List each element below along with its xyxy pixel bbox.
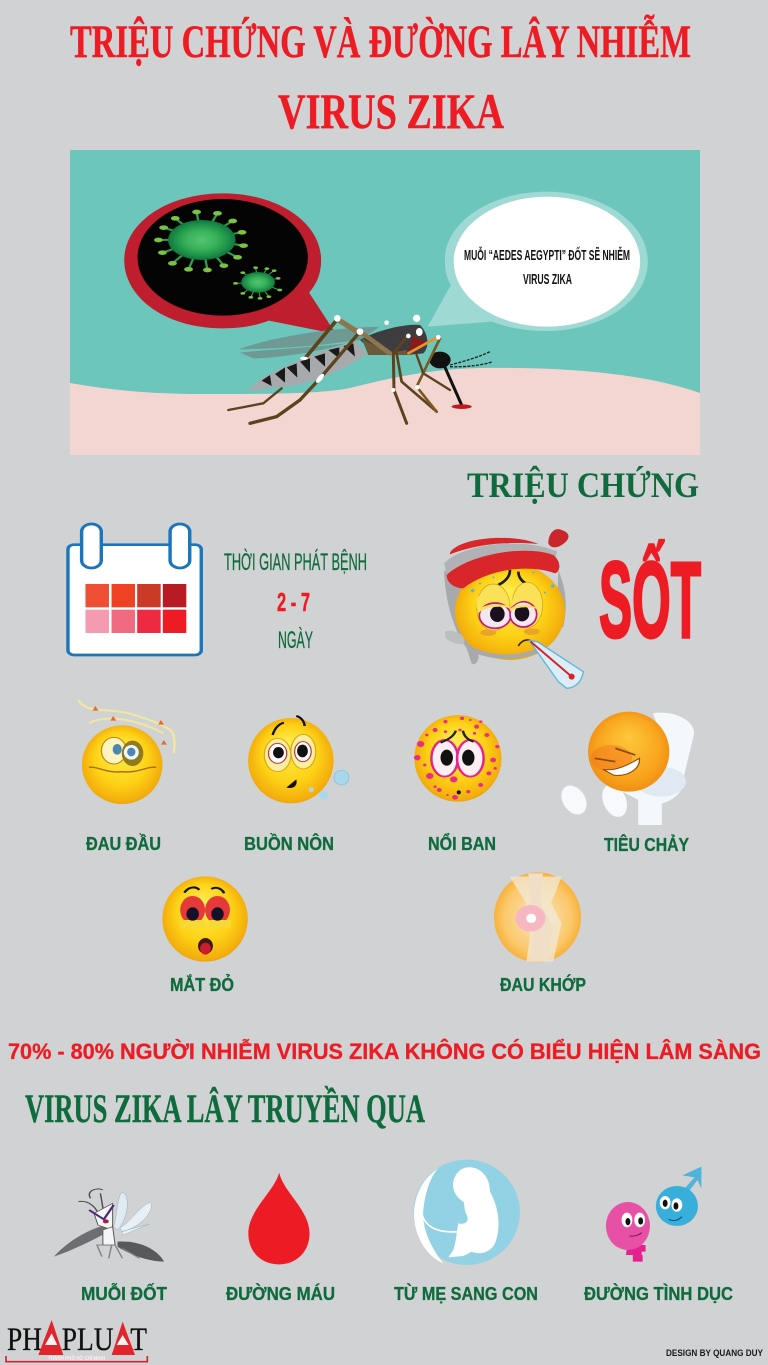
transmission labels: ĐƯỜNG MÁU	[226, 1283, 335, 1304]
symptom icons	[79, 700, 694, 962]
bubble text: MUỖI “AEDES AEGYPTI” ĐỐT SẼ NHIỄM	[464, 246, 630, 264]
heading: transmission: VIRUS ZIKA LÂY TRUYỀN QUA	[25, 1086, 425, 1131]
symptom labels: ĐAU ĐẦU	[86, 833, 161, 854]
text: onset time	[224, 549, 367, 654]
symptom labels	[86, 833, 689, 995]
logo: Phap Luat: PHAPLUAT	[7, 1322, 147, 1358]
transmission labels: TỪ MẸ SANG CON	[394, 1283, 538, 1304]
symptom labels: BUỒN NÔN	[244, 833, 334, 854]
bubble: speech	[428, 192, 648, 331]
title: VIRUS ZIKA	[278, 83, 504, 139]
text: onset time: 2 - 7	[277, 587, 310, 617]
title	[70, 15, 691, 139]
symptom labels: MẮT ĐỎ	[170, 974, 234, 995]
text: onset time: THỜI GIAN PHÁT BỆNH	[224, 549, 367, 576]
bubble: red virus magnifier	[124, 193, 336, 334]
icon: nausea emoji	[248, 716, 349, 803]
icon: calendar	[68, 524, 201, 655]
icon: diarrhea emoji on toilet	[557, 712, 694, 825]
thorax	[360, 325, 427, 355]
abdomen	[247, 342, 367, 391]
transmission labels	[81, 1283, 733, 1304]
symptom labels: TIÊU CHẢY	[604, 834, 689, 855]
icon: blood drop	[248, 1173, 310, 1264]
icon: headache emoji	[79, 700, 175, 804]
heading: symptoms: TRIỆU CHỨNG	[467, 465, 699, 505]
legs	[228, 319, 450, 423]
icon: fetus in womb	[413, 1160, 520, 1265]
transmission icons	[54, 1167, 701, 1264]
icon: fever emoji	[444, 529, 583, 688]
icon: male and female emoji	[606, 1167, 701, 1262]
mosquito	[228, 315, 493, 423]
text: onset time: NGÀY	[278, 627, 313, 654]
icon: rash emoji	[414, 715, 501, 802]
transmission labels: ĐƯỜNG TÌNH DỤC	[584, 1283, 733, 1304]
icon: cartoon mosquito	[54, 1189, 164, 1262]
symptom labels: NỔI BAN	[428, 833, 496, 854]
head and proboscis	[429, 352, 451, 368]
transmission labels: MUỖI ĐỐT	[81, 1283, 167, 1304]
logo: Phap Luat: THÀNH PHỐ HỒ CHÍ MINH	[48, 1354, 105, 1362]
panel: mosquito illustration	[70, 150, 700, 455]
icon: knee joint	[494, 872, 581, 962]
symptom labels: ĐAU KHỚP	[500, 974, 586, 995]
wings	[238, 327, 380, 349]
bubble text	[464, 246, 630, 288]
bubble text: VIRUS ZIKA	[523, 271, 572, 288]
callout: 70-80 percent: 70% - 80% NGƯỜI NHIỄM VIRUS ZIKA KHÔNG CÓ BIỂU HIỆN LÂM SÀNG	[8, 1038, 761, 1064]
icon: red eyes emoji	[162, 876, 248, 962]
